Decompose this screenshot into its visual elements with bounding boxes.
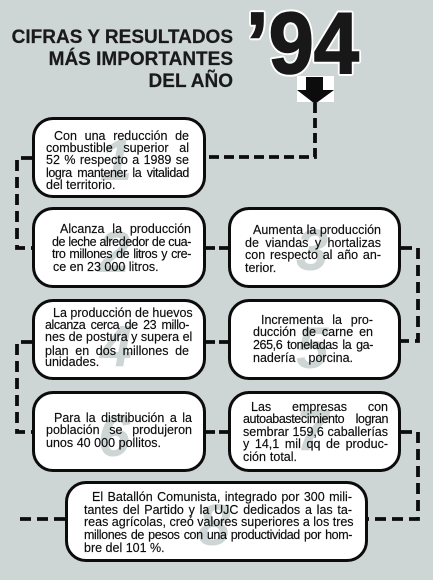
icon: down arrow [297,76,334,103]
text: fact 8: bre del 101 %. [84,541,165,555]
text: fact 4: alcanza cerca de 23 millo- [45,318,189,332]
text: fact 8 [84,490,354,555]
title: MÁS IMPORTANTES [49,49,233,70]
text: fact 3: con respecto al año an- [245,248,381,262]
text: fact 1: combustible superior al [46,141,189,155]
text: fact 4 [45,306,193,369]
text: fact 4: unidades. [45,355,99,369]
text: fact 4: nes de postura y supera el [45,330,192,344]
text: fact 6: Para la distribución a la [54,411,192,425]
text: fact 6: población se produjeron [46,423,192,437]
text: fact 2: ce en 23 000 litros. [53,260,159,274]
number 3: 3 [296,218,328,283]
panel: fact 6 [32,391,206,472]
number 2: 2 [98,220,130,285]
number 7: 7 [296,398,328,463]
text: fact 7 [243,400,388,464]
text: fact 8: tantes del Partido y la UJC dedicados a las ta- [84,503,352,517]
text: fact 2 [52,222,191,274]
title [12,27,233,92]
panel: fact 8 [65,481,368,562]
title: CIFRAS Y RESULTADOS [12,27,233,48]
text: fact 8: millones de pesos con una productividad por hom- [84,528,352,542]
text: fact 2: tro millones de litros y cre- [52,247,191,261]
text: fact 7: sembrar 159,6 caballerías [243,425,388,439]
text: fact 3: terior. [245,261,276,275]
text: fact 3 [245,223,381,275]
text: fact 1: 52 % respecto a 1989 se [46,153,189,167]
text: fact 5: nadería porcina. [253,351,353,365]
text: fact 6: unos 40 000 pollitos. [46,436,161,450]
text: fact 7: y 14,1 mil qq de produc- [243,437,388,451]
text: fact 1: Con una reducción de [54,129,189,143]
text: fact 3: de viandas y hortalizas [245,236,381,250]
panel: fact 4 [32,299,206,380]
text: fact 2: Alcanza la producción [60,222,191,236]
number 6: 6 [98,404,130,469]
text: fact 1: logra mantener la vitalidad [46,166,189,180]
text: fact 4: La producción de huevos [53,306,193,320]
text: fact 5: Incrementa la pro- [261,313,373,327]
title: DEL AÑO [149,71,233,92]
text: fact 1: del territorio. [46,178,115,192]
text: fact 6 [46,411,192,450]
number 8: 8 [198,493,230,558]
text: fact 7: ción total. [243,450,297,464]
text: fact 8: El Batallón Comunista, integrado por 300 mili- [92,490,352,504]
text: fact 1 [46,129,189,192]
text: fact 5: 265,6 toneladas la ga- [253,338,373,352]
number 4: 4 [100,314,132,379]
number 1: 1 [100,128,132,193]
text: fact 7: Las empresas con [251,400,388,414]
panel: fact 3 [228,207,401,288]
text: fact 8: reas agrícolas, creó valores superiores a los tres [84,515,354,529]
panel: fact 5 [228,299,401,380]
number 5: 5 [296,316,328,381]
text: fact 7: autoabastecimiento logran [243,412,388,426]
panel: fact 1 [32,117,206,198]
panel: fact 2 [32,207,206,288]
text: fact 3: Aumenta la producción [253,223,381,237]
panel: fact 7 [228,391,401,472]
text: fact 5 [253,313,373,365]
text: fact 4: plan en dos millones de [45,344,189,358]
text: fact 5: ducción de carne en [253,325,373,339]
text: fact 2: de leche alrededor de cua- [52,235,191,249]
